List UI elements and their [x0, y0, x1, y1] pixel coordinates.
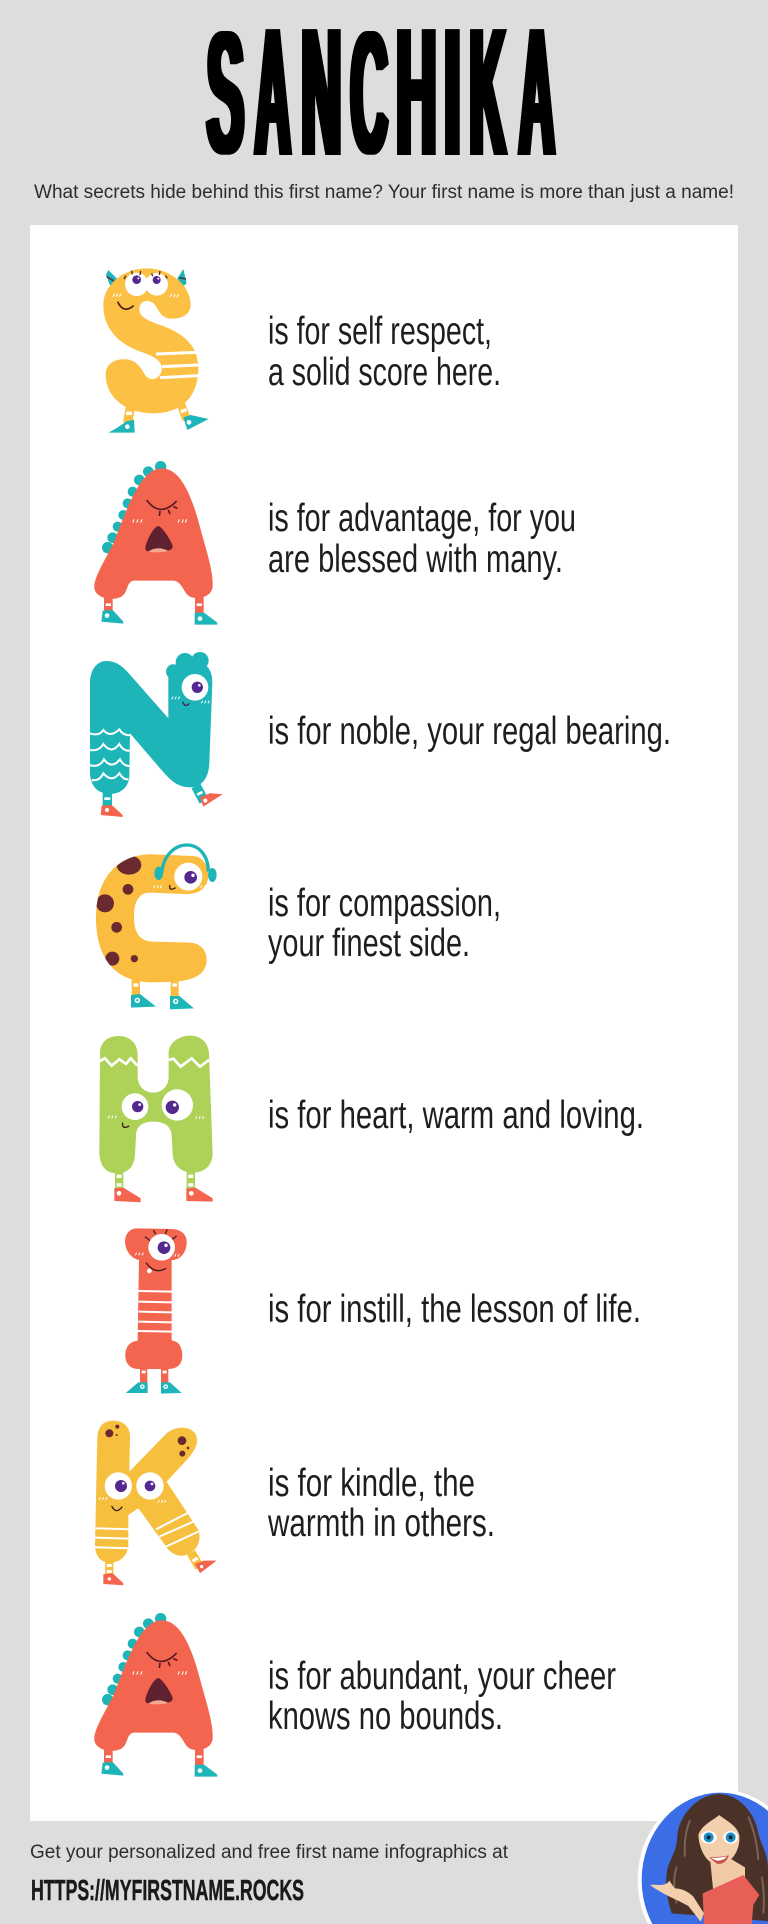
text: A line: is for advantage, for you [268, 497, 576, 540]
icon: letter I monster [125, 1228, 187, 1394]
icon: letter N monster [89, 652, 223, 817]
text: A line [268, 497, 576, 581]
text: C line: your finest side. [268, 922, 470, 965]
subtitle: What secrets hide behind this first name? Your first name is more than just a name! [34, 182, 734, 203]
title [207, 0, 555, 195]
text: H line: is for heart, warm and loving. [268, 1094, 644, 1137]
text: S line: a solid score here. [268, 351, 501, 394]
text: S line [268, 310, 501, 394]
icon: letter A monster (second) [94, 1613, 217, 1777]
icon: letter A monster [94, 461, 217, 625]
text: second A line [268, 1655, 616, 1738]
title: S [207, 0, 244, 191]
text: C line: is for compassion, [268, 882, 501, 925]
footer url: HTTPS://MYFIRSTNAME.ROCKS [31, 1875, 304, 1907]
icon: letter S monster [103, 268, 209, 433]
title: C [351, 0, 388, 191]
text: K line: is for kindle, the [268, 1462, 475, 1505]
text: second A line: is for abundant, your cheer [268, 1655, 616, 1698]
text: C line [268, 882, 501, 965]
icon: avatar badge [638, 1789, 768, 1924]
footer text: Get your personalized and free first name infographics at [30, 1842, 509, 1863]
text: K line: warmth in others. [267, 1502, 495, 1545]
text: S line: is for self respect, [268, 310, 492, 353]
icon: letter K monster [94, 1421, 217, 1585]
icon: letter H monster [99, 1036, 213, 1202]
icon: letter C monster [96, 845, 217, 1009]
text: A line: are blessed with many. [268, 538, 563, 581]
text: I line: is for instill, the lesson of life. [268, 1288, 641, 1331]
text: second A line: knows no bounds. [268, 1695, 503, 1738]
text: K line [267, 1462, 495, 1545]
panel: white letter card [30, 225, 738, 1821]
